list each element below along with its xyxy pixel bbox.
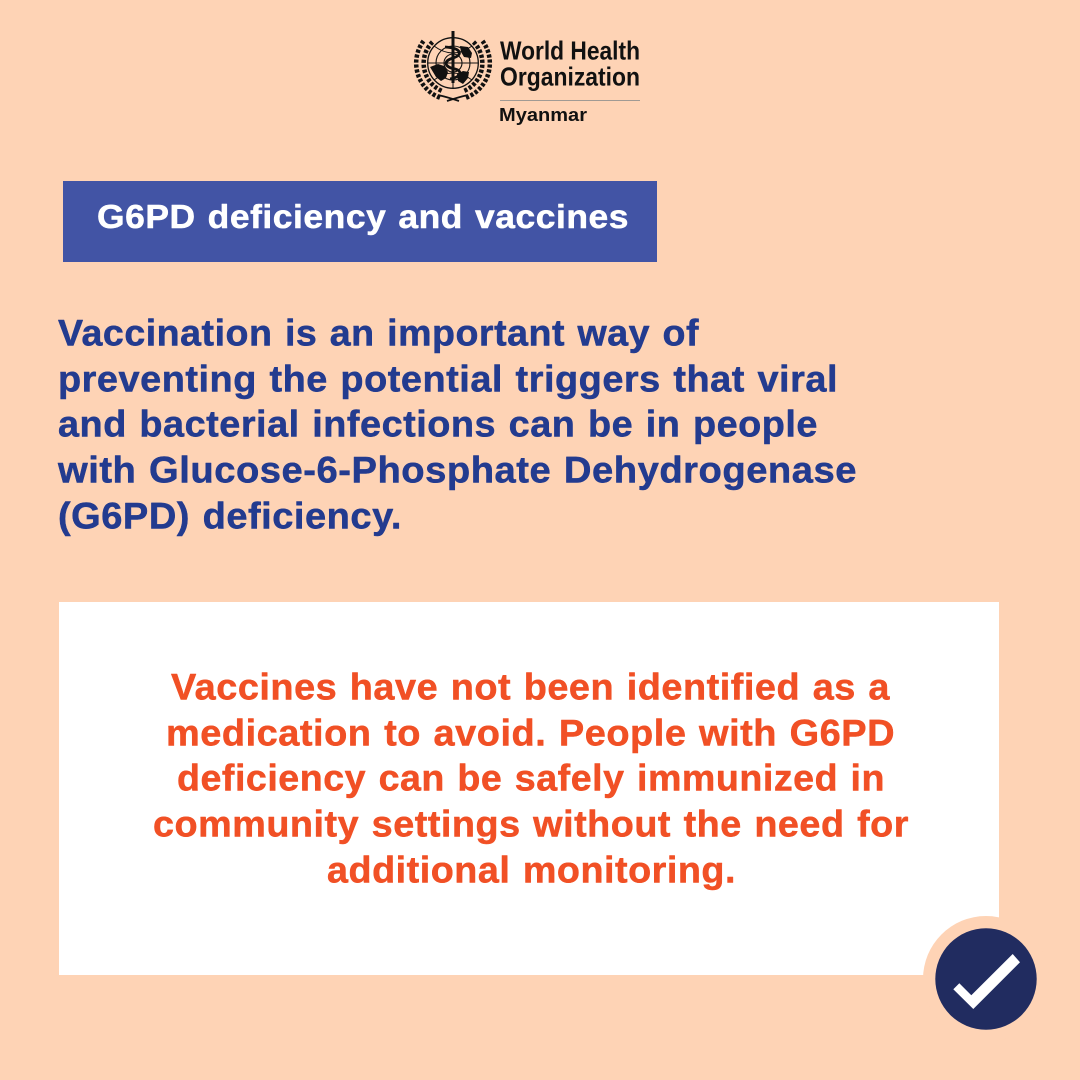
- logo country label: Myanmar: [499, 105, 587, 125]
- intro paragraph: preventing the potential triggers that viral: [58, 358, 838, 400]
- WHO Myanmar logo: Organization: [500, 62, 640, 92]
- callout text: Vaccines have not been identified as a: [171, 666, 890, 708]
- intro paragraph: Vaccination is an important way of: [58, 312, 699, 354]
- WHO Myanmar logo: [416, 31, 640, 125]
- icon: WHO emblem: [416, 31, 490, 101]
- intro paragraph: and bacterial infections can be in people: [58, 404, 818, 444]
- icon: check mark badge: [923, 916, 1049, 1042]
- intro paragraph: (G6PD) deficiency.: [58, 496, 402, 536]
- callout text: additional monitoring.: [327, 850, 736, 890]
- callout text: [153, 666, 909, 890]
- intro paragraph: with Glucose-6-Phosphate Dehydrogenase: [57, 450, 857, 490]
- panel: white callout: [59, 602, 999, 975]
- callout text: deficiency can be safely immunized in: [177, 758, 885, 798]
- callout text: community settings without the need for: [153, 804, 909, 844]
- intro paragraph: [57, 312, 857, 536]
- title banner: G6PD deficiency and vaccines: [97, 198, 629, 235]
- logo wordmark: World Health: [500, 36, 640, 66]
- callout text: medication to avoid. People with G6PD: [166, 712, 895, 754]
- title banner: [63, 181, 657, 262]
